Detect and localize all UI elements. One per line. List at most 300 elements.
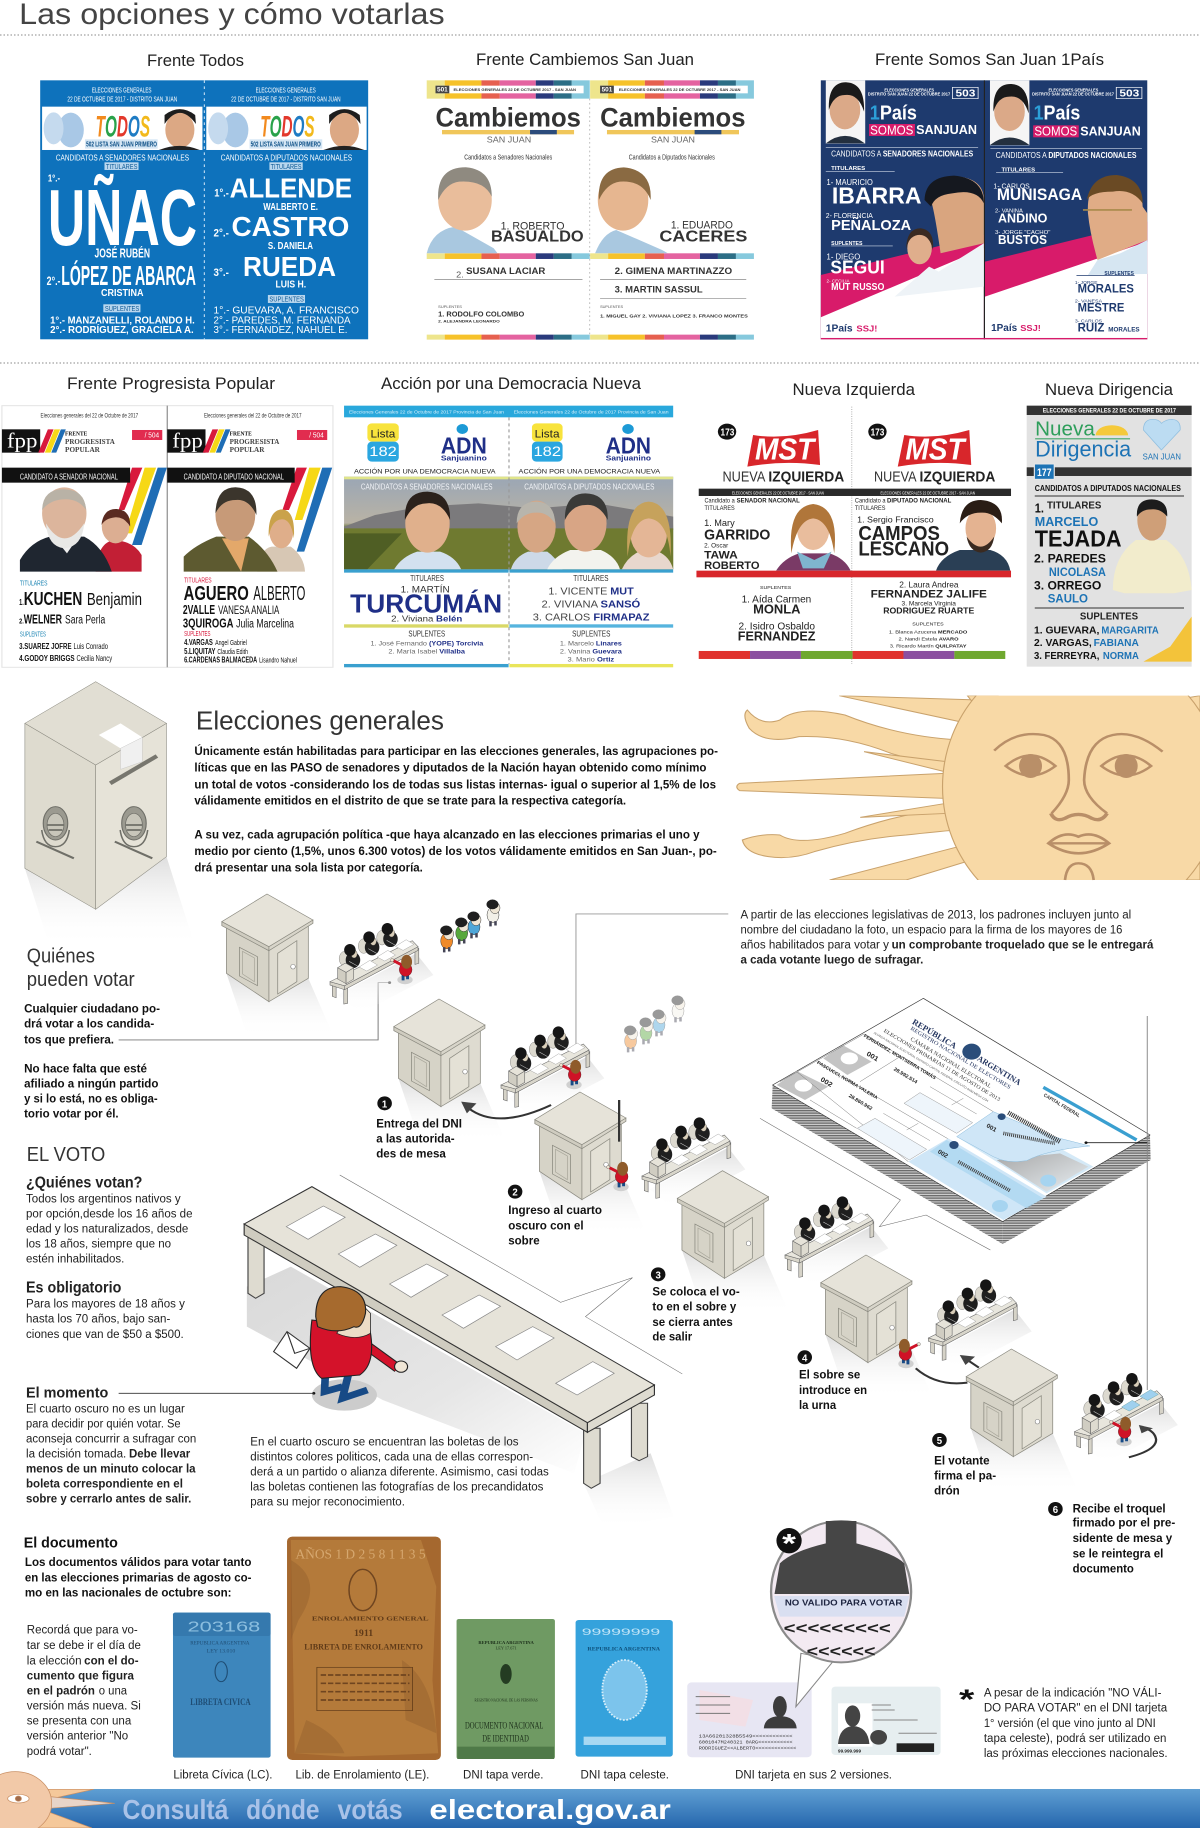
text block: El voto: ¿Quiénes votan? xyxy=(26,1174,142,1191)
text block: recordá: tar se debe ir el día de xyxy=(27,1638,141,1652)
panel: ballot Frente Cambiemos San Juan: SAN JUAN xyxy=(651,135,695,145)
panel: ballot Nueva Izquierda: TAWA xyxy=(704,548,738,561)
panel: ballot Frente Todos: CANDIDATOS A SENADORES NACIONALES xyxy=(56,153,189,163)
heading: Acción por una Democracia Nueva: Acción por una Democracia Nueva xyxy=(381,375,642,393)
panel: ballot Frente Somos San Juan 1País: TITULARES xyxy=(831,166,865,172)
panel: ballot Nueva Izquierda: FERNANDEZ xyxy=(738,629,815,643)
text block: Quiénes pueden votar: torio votar por él. xyxy=(24,1106,119,1120)
panel: ballot Acción por una Democracia Nueva: Elecciones Generales 22 de Octubre de 2017 Provincia de San Juan xyxy=(349,410,504,414)
panel: ballot Acción por una Democracia Nueva: Sanjuanino xyxy=(606,454,651,463)
panel: ballot Acción por una Democracia Nueva: Elecciones Generales 22 de Octubre de 2017 Provincia de San Juan xyxy=(514,410,669,414)
panel: ballot Frente Progresista Popular: Benjamin xyxy=(87,589,142,609)
panel: ballot Nueva Izquierda: 2. Laura Andrea xyxy=(899,580,959,590)
panel: ballot Acción por una Democracia Nueva: 1. MARTÍN xyxy=(401,583,450,595)
panel: ballot Frente Progresista Popular: WELNER xyxy=(24,612,62,626)
panel: ballot Frente Somos San Juan 1País: PEÑALOZA xyxy=(831,215,911,234)
text block: El voto: El cuarto oscuro no es un lugar xyxy=(26,1401,185,1415)
panel: ballot Frente Cambiemos San Juan: 1. EDUARDO xyxy=(671,218,733,231)
panel: ballot Frente Progresista Popular: AGUERO xyxy=(184,582,249,605)
text block: padron note: un comprobante troquelado que se le entregará xyxy=(892,937,1154,951)
arrow head: step 1 xyxy=(461,1102,476,1113)
panel: ballot Nueva Dirigencia: 1. GUEVARA, xyxy=(1034,625,1099,636)
panel: ballot Frente Progresista Popular: FRENTE xyxy=(230,430,252,437)
panel: ballot Nueva Izquierda: IZQUIERDA xyxy=(920,470,995,485)
panel: ballot Frente Somos San Juan 1País: 3- CARLOS xyxy=(1075,319,1103,324)
panel: ballot Frente Todos: UÑAC xyxy=(48,173,197,263)
panel: ballot Frente Somos San Juan 1País: MUT RUSSO xyxy=(831,282,884,293)
illustration: padrón stack: 28.860.962 xyxy=(847,1093,873,1112)
text block: El voto: ciones que van de $50 a $500. xyxy=(26,1327,184,1341)
panel: ballot Frente Cambiemos San Juan: ELECCIONES GENERALES 22 DE OCTUBRE 2017 - SAN JUAN xyxy=(453,87,576,92)
panel: ballot Frente Cambiemos San Juan: 3. MARTIN SASSUL xyxy=(615,285,703,295)
text block: election rules xyxy=(194,744,718,874)
illustration: padrón stack: 001 xyxy=(865,1051,880,1063)
panel: ballot Frente Somos San Juan 1País: CANDIDATOS A DIPUTADOS NACIONALES xyxy=(996,151,1137,160)
panel: ballot Frente Cambiemos San Juan: SUSANA LACIAR xyxy=(466,267,546,277)
step 1: des de mesa xyxy=(376,1146,446,1160)
panel: ballot Frente Todos: S. DANIELA xyxy=(268,241,313,252)
step 3: 3 xyxy=(655,1270,661,1281)
panel: ballot Frente Progresista Popular: POPULAR xyxy=(65,445,100,454)
document: Libreta de Enrolamiento: 1911 xyxy=(354,1629,373,1639)
panel: ballot Frente Todos: 1°.- xyxy=(48,173,60,184)
document: DNI tapa verde: LEY 17.671 xyxy=(496,1646,517,1650)
panel: ballot Frente Cambiemos San Juan: Candidatos a Diputados Nacionales xyxy=(629,153,715,161)
panel: ballot Acción por una Democracia Nueva: CANDIDATOS A DIPUTADOS NACIONALES xyxy=(524,482,654,491)
panel: ballot Frente Cambiemos San Juan: 501 xyxy=(602,86,612,94)
panel: ballot Frente Somos San Juan 1País: MUNISAGA xyxy=(997,185,1082,204)
panel: ballot Frente Cambiemos San Juan: 501 xyxy=(437,86,448,94)
panel: ballot Frente Todos: ELECCIONES GENERALES xyxy=(92,86,152,94)
text block: El voto: aconseja concurrir a sufragar con xyxy=(26,1431,196,1445)
panel: ballot Frente Progresista Popular: Julia Marcelina xyxy=(236,616,294,630)
panel: ballot Frente Progresista Popular: / 504 xyxy=(309,431,324,440)
text block: recordá: se presenta con una xyxy=(27,1714,132,1727)
panel: ballot Frente Progresista Popular: CANDIDATO A DIPUTADO NACIONAL xyxy=(184,472,284,481)
panel: ballot Frente Todos: 2°.- PAREDES, M. FERNANDA xyxy=(214,315,351,326)
step 1 xyxy=(376,1096,462,1160)
illustration: voters queue xyxy=(440,900,500,952)
footnote: asterisk note: las próximas elecciones nacionales. xyxy=(984,1746,1168,1760)
text block: El documento: El documento xyxy=(24,1535,118,1551)
panel: ballot Frente Somos San Juan 1País: SUPLENTES xyxy=(831,240,863,247)
panel: ballot Nueva Izquierda: SUPLENTES xyxy=(760,585,792,591)
document: DNI tapa verde: DOCUMENTO NACIONAL xyxy=(465,1721,543,1731)
callout: padrón detail lines xyxy=(340,1016,1147,1390)
panel: ballot Nueva Izquierda: MST xyxy=(905,431,967,466)
text block: cuarto oscuro: En el cuarto oscuro se encuentran las boletas de los xyxy=(250,1434,519,1448)
text block: El documento: Los documentos válidos para votar tanto xyxy=(25,1555,251,1569)
panel: ballot Frente Progresista Popular: SUPLENTES xyxy=(184,629,210,638)
panel: ballot Acción por una Democracia Nueva: ACCIÓN POR UNA DEMOCRACIA NUEVA xyxy=(354,467,496,475)
panel: ballot Nueva Dirigencia: TITULARES xyxy=(1047,500,1101,511)
illustration: faded voters queue xyxy=(624,996,685,1052)
illustration: third booth and polling table xyxy=(535,1092,745,1235)
panel: ballot Frente Progresista Popular: PROGRESISTA xyxy=(230,437,280,446)
illustration: fifth booth and polling table xyxy=(821,1255,1032,1398)
heading: Frente Todos: Frente Todos xyxy=(147,52,244,70)
step 4: introduce en xyxy=(799,1383,867,1397)
panel: ballot Frente Somos San Juan 1País: SOMOS xyxy=(1034,125,1077,138)
panel: ballot Frente Progresista Popular: SUPLENTES xyxy=(20,630,46,638)
panel: ballot Nueva Izquierda: LESCANO xyxy=(858,538,949,560)
magnifier: no válido para votar: <<<<<< xyxy=(807,1642,876,1660)
document: Libreta Cívica: LEY 13.010 xyxy=(207,1650,236,1655)
panel: ballot Frente Progresista Popular: Elecciones generales del 22 de Octubre de 2017 xyxy=(204,413,302,419)
document: Libreta de Enrolamiento: AÑOS 1 D 2 5 8 1 1 3 5 xyxy=(295,1547,426,1562)
document: DNI tapa celeste: REPUBLICA ARGENTINA xyxy=(587,1648,661,1653)
text block: recordá: o una xyxy=(99,1683,128,1697)
document: DNI tapa celeste xyxy=(576,1620,673,1781)
illustration: big table with voter xyxy=(119,1187,674,1530)
panel: ballot Frente Todos: ALLENDE xyxy=(230,173,352,204)
panel: ballot Acción por una Democracia Nueva: 1. Marcelo Linares xyxy=(560,641,622,647)
step 5 xyxy=(932,1433,996,1497)
panel: ballot Frente Somos San Juan 1País: 2- VANESA xyxy=(1075,299,1103,304)
text block: padron note: a cada votante luego de sufragar. xyxy=(740,952,923,966)
panel: ballot Frente Somos San Juan 1País: 2- VANINA xyxy=(995,209,1023,215)
step 3: Se coloca el vo- xyxy=(652,1285,740,1298)
panel: ballot Frente Progresista Popular: 5.LIQUITAY xyxy=(184,647,216,656)
step 1: a las autorida- xyxy=(376,1131,455,1145)
step 2: Ingreso al cuarto xyxy=(508,1203,602,1217)
step 3: se cierra antes xyxy=(652,1315,733,1329)
panel: ballot Frente Todos: TITULARES xyxy=(106,162,137,171)
panel: ballot Frente Todos: 2°.- RODRÍGUEZ, GRACIELA A. xyxy=(50,324,194,336)
banner: consultá dónde votás: dónde xyxy=(246,1795,320,1825)
panel: ballot Frente Somos San Juan 1País: BUSTOS xyxy=(998,233,1047,247)
panel: ballot Frente Progresista Popular: fpp xyxy=(7,429,38,452)
panel: ballot Frente Todos: 3°.- xyxy=(214,266,229,279)
step 6: 6 xyxy=(1053,1505,1058,1516)
leader lines xyxy=(119,914,728,1050)
step 6: se le reintegra el xyxy=(1073,1546,1163,1560)
panel: ballot Nueva Izquierda: 1. Aída Carmen xyxy=(742,594,811,605)
panel: ballot Frente Cambiemos San Juan: SUPLENTES xyxy=(600,304,623,309)
panel: ballot Nueva Izquierda: 1. Sergio Francisco xyxy=(857,515,934,525)
illustration: padrón stack: CÁMARA NACIONAL ELECTORAL xyxy=(909,1035,994,1090)
step 4: El sobre se xyxy=(799,1367,860,1381)
document: DNI tapa verde: REGISTRO NACIONAL DE LAS PERSONAS xyxy=(475,1698,538,1703)
document: Libreta Cívica: REPUBLICA ARGENTINA xyxy=(190,1642,250,1646)
banner: consultá dónde votás: Consultá xyxy=(122,1795,229,1825)
panel: ballot Frente Todos: 3°.- FERNÁNDEZ, NAHUEL E. xyxy=(214,324,347,336)
text block: El voto: menos de un minuto colocar la xyxy=(26,1461,196,1475)
panel: ballot Frente Somos San Juan 1País: 1- CARLOS xyxy=(993,182,1030,190)
panel: ballot Nueva Dirigencia: 177 xyxy=(1037,466,1052,479)
illustration: fourth booth and polling table xyxy=(677,1171,888,1314)
panel: ballot Frente Cambiemos San Juan: 1. RODOLFO COLOMBO xyxy=(438,310,524,318)
panel: ballot Frente Cambiemos San Juan: 1. ROBERTO xyxy=(501,219,564,232)
panel: ballot Frente Cambiemos San Juan: 2. ALEJANDRA LEONARDO xyxy=(438,319,501,323)
panel: ballot Acción por una Democracia Nueva: CANDIDATOS A SENADORES NACIONALES xyxy=(361,482,493,491)
text block: El voto: EL VOTO xyxy=(27,1143,105,1166)
document: DNI tapa verde: DE IDENTIDAD xyxy=(482,1734,529,1744)
text block: Quiénes pueden votar: y si lo está, no es obliga- xyxy=(24,1091,158,1105)
illustration: padrón stack: ARGENTINA xyxy=(976,1054,1023,1087)
panel: ballot Frente Todos: SUPLENTES xyxy=(105,304,139,313)
panel: ballot Frente Cambiemos San Juan xyxy=(427,80,754,340)
panel: ballot Nueva Izquierda: TITULARES xyxy=(704,504,735,512)
panel: ballot Frente Somos San Juan 1País: MESTRE xyxy=(1078,300,1125,314)
step 6 xyxy=(1048,1501,1175,1575)
panel: ballot Nueva Izquierda xyxy=(696,407,1011,664)
step 5: drón xyxy=(934,1483,960,1497)
panel: ballot Nueva Izquierda: 173 xyxy=(721,427,734,438)
panel: ballot Nueva Izquierda: GARRIDO xyxy=(704,527,770,543)
panel: ballot Acción por una Democracia Nueva: 182 xyxy=(369,444,397,460)
panel: ballot Nueva Dirigencia: 3. FERREYRA, xyxy=(1034,651,1099,662)
panel: ballot Frente Cambiemos San Juan: SAN JUAN xyxy=(487,135,531,145)
text block: election rules: un total de votos -considerando los de todas sus listas internas- igual o superior al 1,5% de los xyxy=(194,777,716,791)
panel: ballot Acción por una Democracia Nueva: TURCUMÁN xyxy=(350,589,502,618)
panel: ballot Acción por una Democracia Nueva: 2. Vanina Guevara xyxy=(560,649,622,655)
panel: ballot Frente Progresista Popular: 2VALLE xyxy=(183,603,215,617)
text block: El voto: edad y los naturalizados, desde xyxy=(26,1222,188,1235)
panel: ballot Frente Cambiemos San Juan: SUPLENTES xyxy=(438,304,462,309)
panel: ballot Nueva Dirigencia: MARGARITA xyxy=(1101,625,1159,636)
panel: ballot Nueva Izquierda: CAMPOS xyxy=(858,522,940,545)
panel: ballot Nueva Izquierda: TITULARES xyxy=(855,504,886,512)
text block: recordá: cumento que figura xyxy=(27,1668,135,1682)
document: Libreta Cívica: Libreta Cívica (LC). xyxy=(173,1767,272,1781)
step 6: documento xyxy=(1073,1561,1134,1575)
text block: election rules: drá presentar una sola lista por categoría. xyxy=(194,861,423,874)
text block: recordá: en el padrón xyxy=(27,1683,95,1697)
panel: ballot Acción por una Democracia Nueva: ADN xyxy=(441,433,487,459)
document: Libreta de Enrolamiento xyxy=(287,1537,441,1781)
step 3: to en el sobre y xyxy=(652,1300,737,1313)
illustration: padrón stack: CAPITAL FEDERAL xyxy=(1042,1093,1081,1119)
panel: ballot Acción por una Democracia Nueva: SUPLENTES xyxy=(572,629,610,638)
text block: Quiénes pueden votar xyxy=(24,945,160,1120)
text block: padron note: años habilitados para votar y xyxy=(740,937,889,951)
text block: El voto: El momento xyxy=(26,1385,109,1401)
illustration: padrón stack: ELECCIONES PRIMARIAS 11 DE AGOSTO DE 2013 xyxy=(882,1028,1001,1103)
banner: consultá dónde votás: electoral.gov.ar xyxy=(429,1795,671,1825)
footnote: asterisk note: * xyxy=(959,1684,975,1715)
step 6: Recibe el troquel xyxy=(1073,1501,1166,1515)
document: DNI tarjeta: 13A66201328B5549<<<<<<<<<<<< xyxy=(699,1734,793,1739)
step 4 xyxy=(797,1350,867,1412)
panel: ballot Frente Progresista Popular: Elecciones generales del 22 de Octubre de 2017 xyxy=(41,413,138,419)
panel: ballot Nueva Izquierda: 2. Oscar xyxy=(704,543,729,550)
text block: cuarto oscuro: para su mejor reconocimiento. xyxy=(250,1494,405,1508)
illustration: padrón stack: REGISTRO NACIONAL DE ELECTORES xyxy=(909,1026,1011,1091)
panel: ballot Frente Somos San Juan 1País: ELECCIONES GENERALES xyxy=(1049,88,1098,92)
illustration: padrón stack: 001 xyxy=(985,1123,998,1134)
panel: ballot Nueva Dirigencia: Dirigencia xyxy=(1035,438,1132,462)
panel: ballot Frente Somos San Juan 1País: CANDIDATOS A SENADORES NACIONALES xyxy=(831,149,973,159)
panel: ballot Frente Todos: LÓPEZ DE ABARCA xyxy=(61,260,196,291)
panel: ballot Nueva Izquierda: RODRIGUEZ RUARTE xyxy=(883,606,975,615)
panel: ballot Frente Todos: 22 DE OCTUBRE DE 2017 - DISTRITO SAN JUAN xyxy=(67,95,177,103)
panel: ballot Frente Todos: CANDIDATOS A DIPUTADOS NACIONALES xyxy=(221,153,352,163)
document: Libreta Cívica: LIBRETA CIVICA xyxy=(190,1698,251,1708)
text block: El voto: hasta los 70 años, bajo san- xyxy=(26,1311,170,1325)
text block: Quiénes pueden votar: afiliado a ningún partido xyxy=(24,1076,158,1090)
panel: ballot Frente Somos San Juan 1País: 1País xyxy=(1034,101,1080,124)
panel: ballot Frente Somos San Juan 1País: 1- DIEGO xyxy=(827,252,860,261)
document: DNI tarjeta: DNI tarjeta en sus 2 versiones. xyxy=(735,1767,892,1781)
panel: ballot Nueva Dirigencia: SUPLENTES xyxy=(1080,611,1138,622)
panel: ballot Acción por una Democracia Nueva: ACCIÓN POR UNA DEMOCRACIA NUEVA xyxy=(519,467,660,475)
banner: consultá dónde votás xyxy=(0,1772,1200,1828)
document: DNI tarjeta: 99.999.999 xyxy=(838,1749,861,1753)
panel: ballot Frente Progresista Popular: Angel Gabriel xyxy=(215,638,247,647)
panel: ballot Frente Cambiemos San Juan: BASUALDO xyxy=(491,227,584,245)
panel: ballot Frente Somos San Juan 1País: 503 xyxy=(1119,88,1139,99)
text block: election rules: líticas que en las PASO de senadores y diputados de la Nación hayan obtenido como mínimo xyxy=(194,761,706,774)
text block: recordá: versión más nueva. Si xyxy=(27,1699,141,1712)
magnifier: no válido para votar: * xyxy=(782,1529,797,1559)
panel: ballot Acción por una Democracia Nueva: Lista xyxy=(370,427,396,440)
panel: ballot Frente Todos: RUEDA xyxy=(243,252,336,282)
text block: El voto: Todos los argentinos nativos y xyxy=(26,1192,181,1205)
panel: ballot Frente Todos: 22 DE OCTUBRE DE 2017 - DISTRITO SAN JUAN xyxy=(231,95,341,103)
panel: ballot Nueva Dirigencia: 2. VARGAS, xyxy=(1034,638,1092,649)
step 2: oscuro con el xyxy=(508,1218,584,1232)
footnote: asterisk note: tapa celeste), podrá ser utilizado en xyxy=(984,1731,1166,1745)
text block: cuarto oscuro: distintos colores politicos, cada una de ellas correspon- xyxy=(250,1449,533,1463)
text block: Quiénes pueden votar: Cualquier ciudadano po- xyxy=(24,1001,160,1015)
document: Libreta de Enrolamiento: Lib. de Enrolamiento (LE). xyxy=(295,1767,429,1781)
document: DNI tarjeta: RODRIGUEZ<<ALBERTO<<<<<<<<<<<<< xyxy=(699,1746,797,1751)
text block: El voto: Es obligatorio xyxy=(26,1280,121,1296)
panel: ballot Frente Cambiemos San Juan: Candidatos a Senadores Nacionales xyxy=(464,153,552,161)
magnifier: no válido para votar xyxy=(771,1521,911,1707)
heading: Frente Cambiemos San Juan: Frente Cambiemos San Juan xyxy=(476,51,694,69)
panel: ballot Nueva Izquierda: SUPLENTES xyxy=(912,622,944,627)
document: DNI tapa celeste: 99999999 xyxy=(582,1628,661,1638)
panel: ballot Acción por una Democracia Nueva: Sanjuanino xyxy=(441,454,487,463)
panel: ballot Frente Progresista Popular: Luis Conrado xyxy=(73,642,108,651)
document: DNI tapa celeste: DNI tapa celeste. xyxy=(581,1767,669,1781)
panel: ballot Nueva Izquierda: 1. Mary xyxy=(704,519,735,529)
illustration: padrón stack: REPÚBLICA xyxy=(911,1016,959,1051)
panel: ballot Nueva Izquierda: 2. Isidro Osbaldo xyxy=(739,621,815,632)
panel: ballot Nueva Dirigencia: NORMA xyxy=(1103,651,1139,662)
magnifier: no válido para votar: <<<<<<<<< xyxy=(784,1618,891,1637)
panel: ballot Frente Somos San Juan 1País: SUPLENTES xyxy=(1104,271,1134,277)
text block: Quiénes pueden votar: drá votar a los candida- xyxy=(24,1016,154,1030)
text block: El voto: sobre y cerrarlo antes de salir. xyxy=(26,1491,191,1505)
panel: ballot Acción por una Democracia Nueva: 2. Viviana Belén xyxy=(391,614,462,623)
panel: ballot Frente Progresista Popular: TITULARES xyxy=(20,579,47,588)
panel: ballot Frente Somos San Juan 1País: SSJ! xyxy=(856,324,877,333)
panel: ballot Nueva Izquierda: FERNANDEZ JALIFE xyxy=(871,587,987,600)
panel: ballot Frente Progresista Popular: 2. xyxy=(19,617,24,625)
illustration: sixth booth and polling table xyxy=(966,1349,1178,1492)
panel: ballot Nueva Izquierda: ELECCIONES GENERALES 22 DE OCTUBRE 2017 - SAN JUAN xyxy=(732,491,824,495)
step 2 xyxy=(508,1185,602,1247)
panel: ballot Nueva Izquierda: NUEVA xyxy=(874,470,917,485)
panel: ballot Nueva Izquierda: NUEVA xyxy=(722,470,766,485)
panel: ballot Frente Cambiemos San Juan: CACERES xyxy=(659,227,747,245)
panel: ballot Frente Somos San Juan 1País: DISTRITO SAN JUAN 22 DE OCTUBRE 2017 xyxy=(868,92,951,97)
icon: sun xyxy=(736,696,1200,880)
panel: ballot Frente Progresista Popular: POPULAR xyxy=(230,445,265,454)
footnote: asterisk note: DO PARA VOTAR" en el DNI tarjeta xyxy=(984,1701,1168,1714)
panel: ballot Nueva Izquierda: 3. Marcela Virginia xyxy=(902,601,956,607)
illustration: padrón stack: 002 xyxy=(819,1076,834,1089)
magnifier: no válido para votar: NO VALIDO PARA VOTAR xyxy=(785,1598,903,1608)
text block: Quiénes pueden votar: pueden votar xyxy=(27,968,135,991)
heading: Frente Progresista Popular: Frente Progresista Popular xyxy=(67,375,276,393)
panel: ballot Frente Somos San Juan 1País: SANJUAN xyxy=(916,123,977,137)
text block: padron note xyxy=(740,907,1154,966)
footnote: asterisk note: A pesar de la indicación "NO VÁLI- xyxy=(984,1686,1161,1699)
panel: ballot Acción por una Democracia Nueva: 2. VIVIANA SANSÓ xyxy=(542,598,640,610)
panel: ballot Acción por una Democracia Nueva: 1. VICENTE MUT xyxy=(548,586,634,597)
text block: recordá: podrá votar". xyxy=(27,1744,92,1758)
panel: ballot Frente Progresista Popular: Sara Perla xyxy=(65,612,106,626)
text block: Quiénes pueden votar: tos que prefiera. xyxy=(24,1032,114,1046)
panel: ballot Nueva Dirigencia: 1. xyxy=(1035,502,1044,515)
illustration: padrón stack: 28.992.514 xyxy=(892,1067,918,1086)
panel: ballot Frente Progresista Popular: Cecilia Nancy xyxy=(77,654,113,663)
text block: cuarto oscuro: las boletas contienen las fotografías de los precandidatos xyxy=(250,1479,543,1493)
panel: ballot Frente Todos: 1°.- GUEVARA, A. FRANCISCO xyxy=(214,305,359,316)
illustration: first booth and polling table xyxy=(222,894,433,1037)
panel: ballot Frente Somos San Juan 1País: SEGUI xyxy=(830,258,885,278)
text block: election rules: A su vez, cada agrupación política -que haya alcanzado en las elecciones primarias el uno y xyxy=(194,827,700,841)
panel: ballot Frente Todos: WALBERTO E. xyxy=(263,202,318,213)
illustration: padrón stack: 002 xyxy=(936,1149,949,1160)
banner: consultá dónde votás: votás xyxy=(338,1795,403,1825)
panel: ballot Frente Cambiemos San Juan: 2. xyxy=(456,270,464,279)
panel: ballot Frente Somos San Juan 1País: SANJUAN xyxy=(1080,124,1141,138)
panel: ballot Nueva Izquierda: 2. Nandi Estela AVARO xyxy=(899,637,959,642)
panel: ballot Frente Somos San Juan 1País: 2- FLORENCIA xyxy=(826,211,874,220)
panel: ballot Frente Progresista Popular: 6.CARDENAS BALMACEDA xyxy=(184,655,257,664)
illustration: padrón stack: FERNÁNDEZ, MONTSERRA TOMÁS xyxy=(863,1032,937,1080)
panel: ballot Nueva Izquierda: Candidato a xyxy=(704,497,735,505)
panel: ballot Frente Progresista Popular: ALBERTO xyxy=(253,582,305,605)
panel: ballot Frente Somos San Juan 1País: 1- JORGE xyxy=(1075,280,1098,286)
panel: ballot Nueva Dirigencia: 2. PAREDES xyxy=(1034,552,1106,565)
panel: ballot Frente Cambiemos San Juan: ELECCIONES GENERALES 22 DE OCTUBRE 2017 - SAN JUAN xyxy=(619,87,741,92)
step 1: 1 xyxy=(382,1099,387,1110)
step 2: 2 xyxy=(512,1187,518,1198)
panel: ballot Nueva Dirigencia: SAULO xyxy=(1048,591,1088,605)
panel: ballot Frente Progresista Popular: 4.VARGAS xyxy=(184,638,213,647)
panel: ballot Frente Todos: CASTRO xyxy=(232,212,349,242)
panel: ballot Nueva Izquierda: MONLA xyxy=(753,602,801,616)
text block: El documento: en las elecciones primarias de agosto co- xyxy=(25,1570,251,1584)
panel: ballot Nueva Izquierda: ELECCIONES GENERALES 22 DE OCTUBRE 2017 - SAN JUAN xyxy=(881,491,975,495)
panel: ballot Frente Progresista Popular: / 504 xyxy=(145,431,160,440)
panel: ballot Frente Somos San Juan 1País: 1País xyxy=(991,323,1017,334)
arrow: step 6 xyxy=(1129,1425,1156,1457)
text block: recordá: con el do- xyxy=(84,1653,139,1667)
panel: ballot Frente Todos: 502 LISTA SAN JUAN PRIMERO xyxy=(251,140,321,149)
panel: ballot Nueva Dirigencia: Nueva xyxy=(1035,417,1095,440)
panel: ballot Frente Somos San Juan 1País: 1- MAURICIO xyxy=(827,178,873,187)
panel: ballot Frente Somos San Juan 1País: DISTRITO SAN JUAN 22 DE OCTUBRE 2017 xyxy=(1032,92,1114,97)
arrow: step 4 to 5 xyxy=(916,1355,979,1383)
panel: ballot Acción por una Democracia Nueva: 182 xyxy=(533,444,561,460)
text block: El voto: Debe llevar xyxy=(129,1446,190,1460)
step 3: de salir xyxy=(652,1329,692,1343)
panel: ballot Nueva Izquierda: Candidato a xyxy=(855,497,885,505)
document: Libreta de Enrolamiento: ENROLAMIENTO GENERAL xyxy=(312,1615,429,1623)
text block: election rules: válidamente emitidos en el distrito de que se trate para la respectiva categoría. xyxy=(194,793,626,807)
panel: ballot Frente Somos San Juan 1País: 503 xyxy=(956,88,975,99)
text block: El voto: por opción,desde los 16 años de xyxy=(26,1207,192,1220)
panel: ballot Frente Progresista Popular xyxy=(2,406,333,667)
panel: ballot Frente Todos: ELECCIONES GENERALES xyxy=(256,86,316,94)
